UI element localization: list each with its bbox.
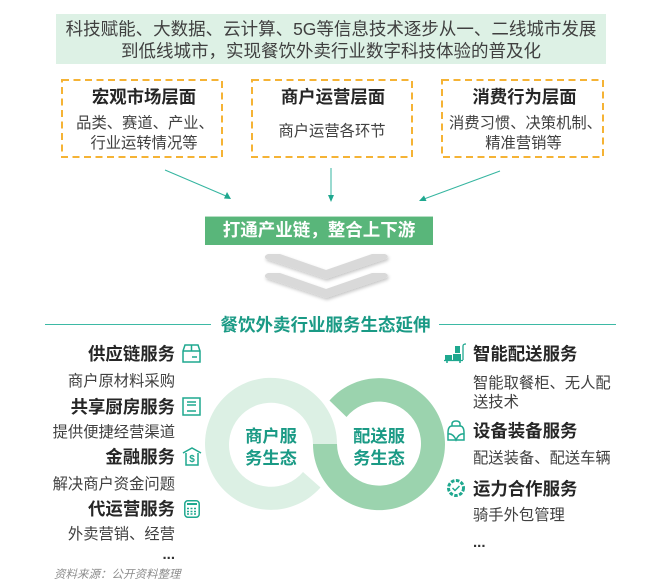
banner: integrate the industry chain	[205, 216, 433, 245]
heading: merchant operations: 商户运营层面	[281, 87, 385, 107]
panel: intro banner	[56, 14, 606, 64]
heading: delivery capacity service: 运力合作服务	[473, 479, 577, 499]
text: equipment detail: 配送装备、配送车辆	[473, 450, 611, 467]
text: merchant operations details: 商户运营各环节	[278, 123, 386, 140]
icon: finance house: $	[189, 454, 195, 465]
icon: calculator	[184, 500, 200, 518]
text: left ellipsis: ...	[162, 546, 175, 563]
text: smart delivery detail: 智能取餐柜、无人配	[473, 375, 611, 392]
text: right ellipsis: ...	[473, 534, 486, 551]
panel: merchant operations level	[251, 79, 413, 158]
section heading text: 餐饮外卖行业服务生态延伸	[220, 315, 430, 335]
text: shared kitchen detail: 提供便捷经营渠道	[53, 424, 175, 441]
heading: operations agency service: 代运营服务	[88, 499, 175, 519]
label: delivery service ecosystem: 务生态	[353, 448, 405, 468]
panel: consumer behaviour level	[441, 79, 604, 158]
banner text: 打通产业链，整合上下游	[223, 220, 415, 240]
icon: finance house	[182, 447, 202, 466]
panel: macro market level	[61, 79, 223, 158]
text: consumer behaviour details line 2: 精准营销等	[485, 135, 562, 152]
heading: supply chain service: 供应链服务	[88, 344, 175, 364]
label: merchant service ecosystem: 商户服	[245, 426, 297, 446]
text: consumer behaviour details: 消费习惯、决策机制、	[449, 115, 602, 132]
icon: kitchen	[182, 397, 201, 416]
heading: macro market: 宏观市场层面	[92, 87, 196, 107]
heading: shared kitchen service: 共享厨房服务	[71, 397, 175, 417]
intro text line 1: 科技赋能、大数据、云计算、5G等信息技术逐步从一、二线城市发展	[66, 19, 596, 39]
text: supply chain detail: 商户原材料采购	[68, 373, 175, 390]
source note: 资料来源：公开资料整理	[54, 569, 180, 581]
icon: gear check	[447, 479, 465, 497]
text: macro market details: 品类、赛道、产业、	[76, 115, 214, 132]
heading: smart delivery service: 智能配送服务	[473, 344, 577, 364]
text: smart delivery detail	[473, 374, 611, 411]
heading: consumer behaviour: 消费行为层面	[472, 87, 577, 107]
label: merchant service ecosystem	[245, 426, 297, 468]
label: merchant service ecosystem: 务生态	[245, 448, 297, 468]
icon: package	[182, 344, 201, 363]
text: capacity detail: 骑手外包管理	[473, 507, 565, 524]
label: delivery service ecosystem: 配送服	[353, 426, 405, 446]
label: delivery service ecosystem	[353, 426, 405, 468]
heading: equipment service: 设备装备服务	[473, 421, 577, 441]
text: macro market details line 2: 行业运转情况等	[90, 135, 198, 152]
text: smart delivery detail: 送技术	[473, 394, 519, 411]
text: financial detail: 解决商户资金问题	[53, 476, 175, 493]
icon: delivery trolley	[444, 343, 466, 363]
text: operations agency detail: 外卖营销、经营	[68, 526, 175, 543]
intro text line 2: 到低线城市，实现餐饮外卖行业数字科技体验的普及化	[121, 41, 541, 61]
heading: financial service: 金融服务	[105, 447, 175, 467]
icon: backpack	[447, 420, 465, 442]
